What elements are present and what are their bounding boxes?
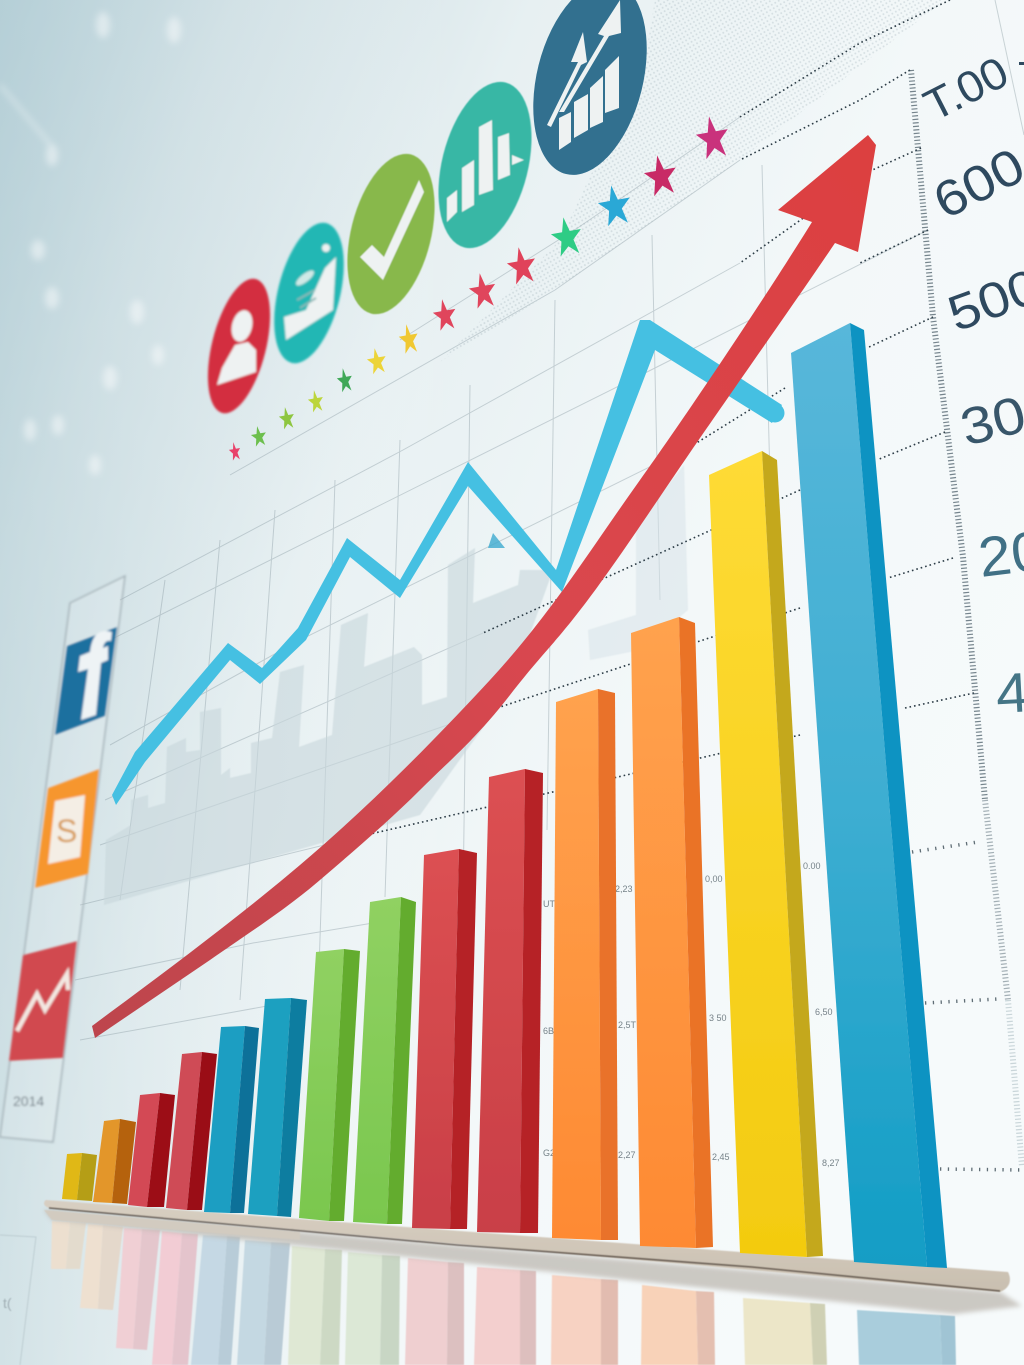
tiny axis tick labels: 2,5T	[618, 1020, 637, 1030]
left social panel	[0, 576, 125, 1142]
tiny axis tick labels: 6B	[543, 1026, 554, 1036]
bar 10 red	[477, 769, 543, 1233]
reflection 9	[405, 1258, 464, 1365]
bar 9 red	[412, 849, 477, 1229]
background bokeh lights	[0, 12, 181, 475]
reflection 11	[551, 1275, 618, 1365]
tiny axis tick labels: 8,27	[822, 1158, 840, 1168]
reflection 14	[857, 1310, 956, 1365]
icon: check mark	[332, 145, 450, 323]
tick marks on lower guide lines	[912, 842, 1024, 1170]
tiny axis tick labels: 2,27	[618, 1150, 636, 1160]
tiny axis tick labels: 6,50	[815, 1007, 833, 1017]
reflection 12	[641, 1285, 715, 1365]
platform base	[44, 1200, 1022, 1314]
axis value labels: T.00	[916, 47, 1016, 131]
icon: red trend tile	[9, 941, 77, 1061]
reflection 8	[345, 1252, 400, 1365]
tiny axis tick labels: 0,00	[705, 874, 723, 884]
icon: person	[196, 273, 282, 419]
bar 7 green	[299, 949, 360, 1221]
reflection 7	[288, 1246, 342, 1365]
panel year label: 2014	[13, 1093, 44, 1109]
tiny axis tick labels: 3 50	[709, 1013, 727, 1023]
gray background bar silhouette	[104, 465, 688, 905]
icon: orange tile	[35, 769, 99, 888]
tiny axis tick labels: 2,23	[615, 884, 633, 894]
bar 3 red	[128, 1093, 175, 1207]
bar 12 orange	[631, 617, 713, 1248]
icon: orange tile: S	[56, 813, 77, 849]
dotted value guide lines	[353, 0, 974, 838]
tiny axis tick labels	[543, 861, 840, 1168]
dotted halftone band	[440, 0, 945, 362]
blue line chart	[112, 320, 784, 805]
rating stars	[228, 114, 732, 461]
reflection 4	[152, 1231, 198, 1365]
bar 8 green	[353, 897, 416, 1224]
reflection 10	[474, 1267, 536, 1365]
tiny axis tick labels: UT	[543, 899, 555, 909]
reflection 13	[743, 1298, 827, 1365]
reflection 5	[191, 1235, 240, 1365]
small blue marker	[488, 533, 505, 548]
faint reflected frame: t(	[3, 1295, 12, 1311]
rising red arrow	[92, 135, 876, 1038]
bar 2 orange	[93, 1119, 136, 1204]
icon: bar chart	[423, 72, 547, 258]
bar 13 yellow	[709, 451, 823, 1257]
top icon row	[196, 0, 665, 419]
bar 11 orange	[552, 689, 618, 1240]
faint reflected frame	[0, 1235, 36, 1365]
bar reflections	[51, 1221, 956, 1365]
reflection 3	[116, 1228, 160, 1350]
icon: facebook tile	[55, 627, 117, 735]
bar 5 blue	[204, 1026, 259, 1213]
icon: tray and document	[262, 216, 356, 370]
reflection 6	[237, 1240, 290, 1365]
grid lines	[75, 0, 1024, 1040]
bar 1 yellow	[62, 1153, 97, 1201]
axis value labels	[916, 47, 1024, 726]
bar 14 blue	[791, 323, 947, 1268]
tiny axis tick labels: 0.00	[803, 861, 821, 871]
reflection 2	[80, 1224, 123, 1310]
reflection 1	[51, 1221, 86, 1269]
tiny axis tick labels: 2,45	[712, 1152, 730, 1162]
bar 4 red	[166, 1052, 217, 1210]
3D bar chart	[62, 323, 947, 1268]
tiny axis tick labels: G2	[543, 1148, 555, 1158]
panel frame	[0, 576, 125, 1142]
right value axis frame	[911, 70, 1022, 1167]
bar 6 blue	[248, 998, 307, 1217]
icon: growth arrows	[515, 0, 665, 187]
